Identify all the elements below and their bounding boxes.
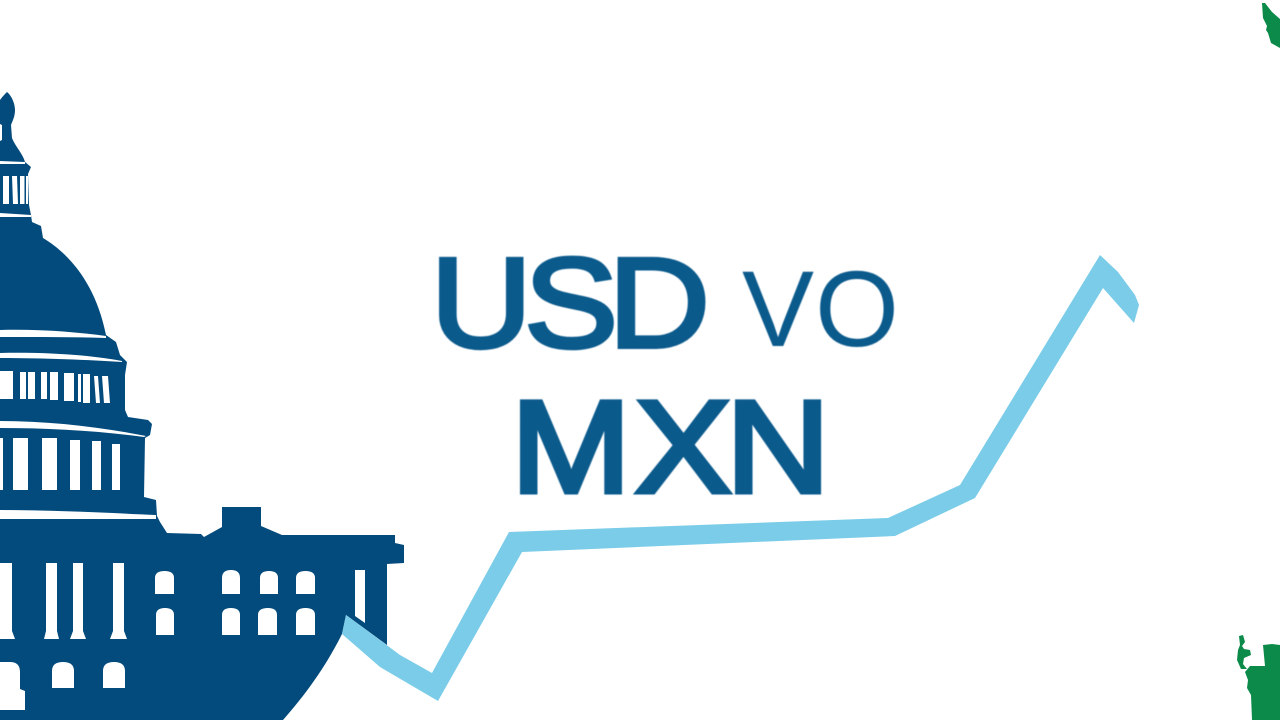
drum windows	[0, 371, 110, 403]
icon: green shape top right	[1262, 3, 1280, 48]
title: VO: VO	[742, 248, 899, 369]
icon: capitol building	[0, 92, 404, 720]
lantern bands and columns	[0, 161, 31, 217]
colonnade	[0, 438, 120, 490]
arrow: rising exchange rate line	[342, 255, 1139, 701]
title: MXN: MXN	[511, 374, 830, 521]
icon: green shape bottom right	[1237, 635, 1280, 720]
lower columns	[0, 563, 365, 639]
windows	[155, 571, 174, 635]
title: USD: USD	[430, 231, 710, 375]
